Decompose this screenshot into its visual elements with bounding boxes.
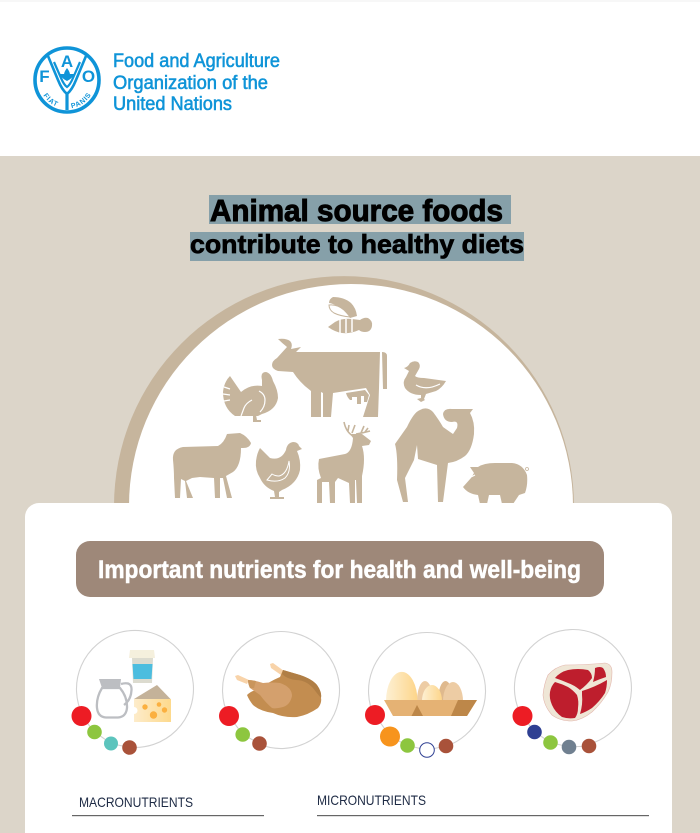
title <box>190 193 524 261</box>
logo wordmark: United Nations <box>113 94 232 115</box>
nutrient beads <box>72 706 137 755</box>
icon: cheese <box>134 685 171 722</box>
logo emblem: O <box>82 67 95 86</box>
panel: eggs <box>365 632 486 757</box>
icon: pitcher <box>97 679 132 718</box>
logo emblem: FIAT <box>44 92 58 106</box>
icon: roast chicken <box>235 663 321 717</box>
macronutrients heading: MACRONUTRIENTS <box>79 794 193 810</box>
animals <box>173 297 528 504</box>
icon: egg basket <box>384 672 477 716</box>
icon: bee <box>328 297 372 333</box>
icon: pig <box>463 463 528 504</box>
nutrient beads <box>219 706 267 751</box>
title: Animal source foods <box>210 193 503 228</box>
arch <box>114 276 574 506</box>
heading banner <box>76 541 604 597</box>
icon: duck <box>404 361 446 402</box>
icon: hen <box>256 442 302 499</box>
icon: camel <box>395 408 474 502</box>
icon: deer <box>317 422 371 503</box>
nutrient beads <box>512 706 596 754</box>
logo emblem: PANIS <box>70 93 90 108</box>
icon: steak <box>543 663 612 721</box>
icon: turkey <box>223 372 278 422</box>
content panel <box>25 503 672 833</box>
logo emblem: A <box>61 52 73 71</box>
logo emblem <box>33 46 101 114</box>
icon: udder <box>346 390 369 404</box>
micronutrients heading: MICRONUTRIENTS <box>317 792 426 808</box>
logo wordmark: Organization of the <box>113 73 268 94</box>
panel: poultry <box>219 632 340 751</box>
logo emblem: F <box>39 67 50 86</box>
panel: meat <box>512 630 631 754</box>
icon: sheep <box>173 433 251 498</box>
nutrient beads <box>365 705 453 757</box>
icon: cup <box>129 650 155 683</box>
logo wordmark: Food and Agriculture <box>113 51 280 72</box>
panel: dairy <box>72 630 193 755</box>
heading banner: Important nutrients for health and well-being <box>98 556 581 584</box>
icon: cow <box>272 339 380 417</box>
FAO logo <box>33 46 280 115</box>
title: contribute to healthy diets <box>190 229 524 259</box>
logo wordmark <box>113 51 280 115</box>
icon: cow tail <box>382 352 387 389</box>
